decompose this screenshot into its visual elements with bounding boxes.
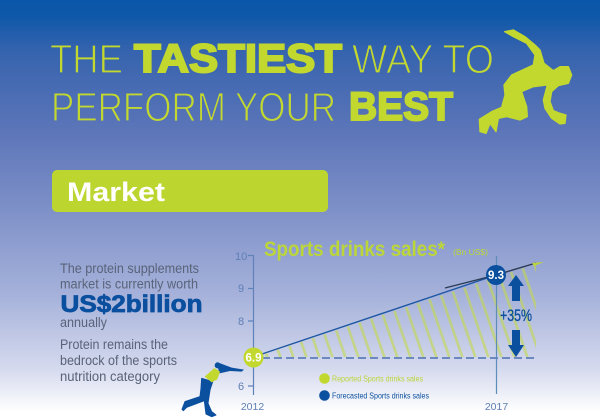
big number: US$2billion: US$2billion (60, 291, 202, 318)
text line: nutrition category (60, 369, 161, 385)
y axis labels (235, 251, 247, 393)
chart unit: (Bn US$) (453, 248, 488, 257)
heading: Market: Market (67, 177, 165, 207)
athlete head (215, 362, 221, 368)
vertical line 2017 (496, 256, 498, 394)
text line: The protein supplements (60, 261, 199, 277)
chart title: Sports drinks sales* (264, 238, 446, 261)
label 6: 6 (238, 381, 244, 393)
marker value: 6.9 (246, 352, 262, 364)
x axis label 2012: 2012 (241, 401, 264, 413)
text line: market is currently worth (60, 276, 198, 292)
panel: Market heading bar (52, 170, 328, 212)
title word: TASTIEST: TASTIEST (134, 37, 342, 81)
icon: sprinter silhouette (479, 30, 572, 133)
bar background (52, 170, 328, 212)
baseline dashed line (262, 357, 536, 359)
title word: THE: THE (50, 36, 123, 82)
title words: WAY TO: WAY TO (352, 36, 494, 82)
legend label: forecasted: Forecasted Sports drinks sales (332, 392, 429, 400)
arrow down (508, 330, 524, 357)
marker circle (244, 348, 264, 368)
text line: annually (60, 315, 108, 331)
marker 9.3 (486, 265, 506, 285)
trend line (262, 275, 496, 354)
athlete vest (205, 368, 220, 382)
text block: market facts (60, 261, 202, 385)
marker 6.9 (244, 348, 264, 368)
marker circle (486, 265, 506, 285)
arrow tip (532, 262, 544, 266)
icon: shot-put athlete (182, 362, 244, 417)
legend (319, 373, 429, 401)
marker value: 9.3 (488, 270, 504, 282)
hatched growth area (262, 264, 536, 357)
y axis (248, 255, 254, 395)
title words: PERFORM YOUR: PERFORM YOUR (51, 84, 336, 130)
athlete arm (217, 362, 244, 373)
label 9: 9 (238, 283, 244, 295)
title word: BEST: BEST (349, 85, 453, 129)
legend swatch: forecasted (319, 390, 330, 401)
chart: Sports drinks sales (235, 238, 544, 413)
x axis label 2017: 2017 (485, 401, 508, 413)
label 10: 10 (235, 251, 247, 263)
growth label: +35% (500, 306, 532, 325)
legend label: reported: Reported Sports drinks sales (332, 374, 423, 384)
label 8: 8 (238, 316, 244, 328)
legend swatch: reported (319, 373, 330, 384)
trend line extension (445, 263, 536, 288)
text line: bedrock of the sports (60, 353, 177, 369)
text line: Protein remains the (60, 337, 168, 353)
athlete body (182, 378, 216, 417)
arrow up (508, 275, 524, 301)
title (50, 36, 494, 130)
